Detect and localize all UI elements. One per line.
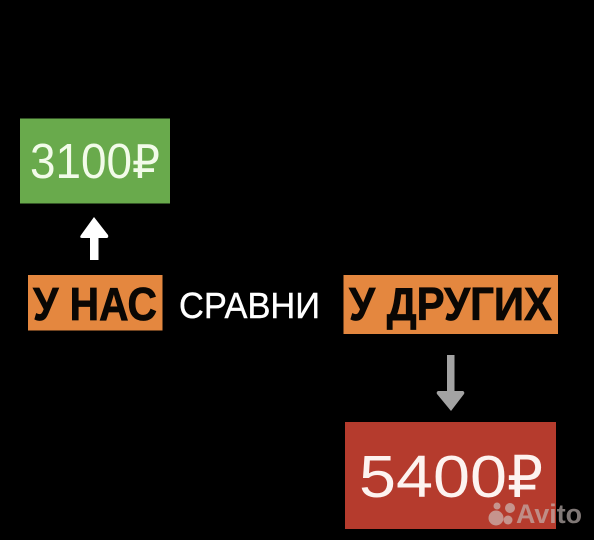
- watermark text: Avito: [516, 499, 582, 529]
- green price box: 3100: 3100: [30, 135, 132, 189]
- green price box: 3100: [20, 118, 170, 204]
- arrow: down, grey: [437, 355, 464, 411]
- label: у нас: У НАС: [33, 278, 157, 330]
- watermark: avito: [488, 499, 582, 529]
- arrow: up, white: [80, 217, 108, 260]
- green price box: 3100: ₽: [132, 136, 160, 188]
- red price box: 5400: ₽: [507, 445, 543, 510]
- watermark icon: circles: [488, 502, 515, 526]
- red price box: 5400: [345, 422, 556, 529]
- text: сравни: СРАВНИ: [179, 285, 320, 326]
- red price box: 5400: 5400: [359, 444, 507, 510]
- label: у других: У ДРУГИХ: [349, 278, 552, 330]
